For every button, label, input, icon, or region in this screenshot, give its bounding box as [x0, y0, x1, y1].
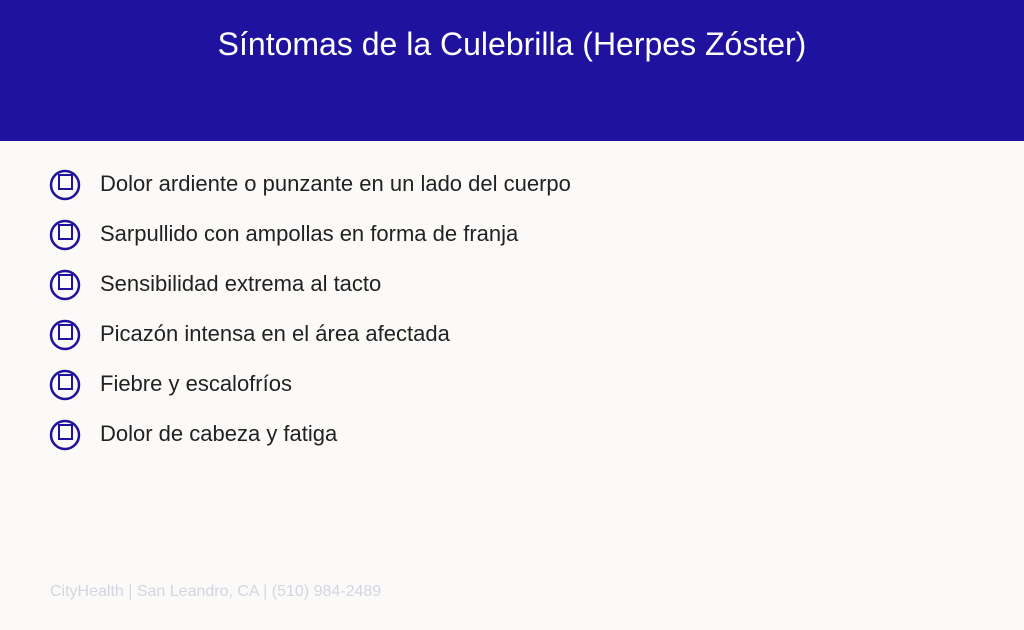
item 5	[50, 370, 292, 400]
item 4: Picazón intensa en el área afectada	[100, 321, 450, 346]
header bar	[0, 0, 1024, 141]
item 5: Fiebre y escalofríos	[100, 371, 292, 396]
footer: CityHealth | San Leandro, CA | (510) 984-2489	[50, 583, 381, 600]
title: Síntomas de la Culebrilla (Herpes Zóster)	[218, 26, 806, 62]
item 6: Dolor de cabeza y fatiga	[100, 421, 337, 446]
item 3: Sensibilidad extrema al tacto	[100, 271, 381, 296]
symptom list	[50, 170, 571, 450]
item 3	[50, 270, 381, 300]
item 6	[50, 420, 338, 450]
item 2: Sarpullido con ampollas en forma de franja	[100, 221, 518, 246]
item 1: Dolor ardiente o punzante en un lado del cuerpo	[100, 171, 571, 196]
